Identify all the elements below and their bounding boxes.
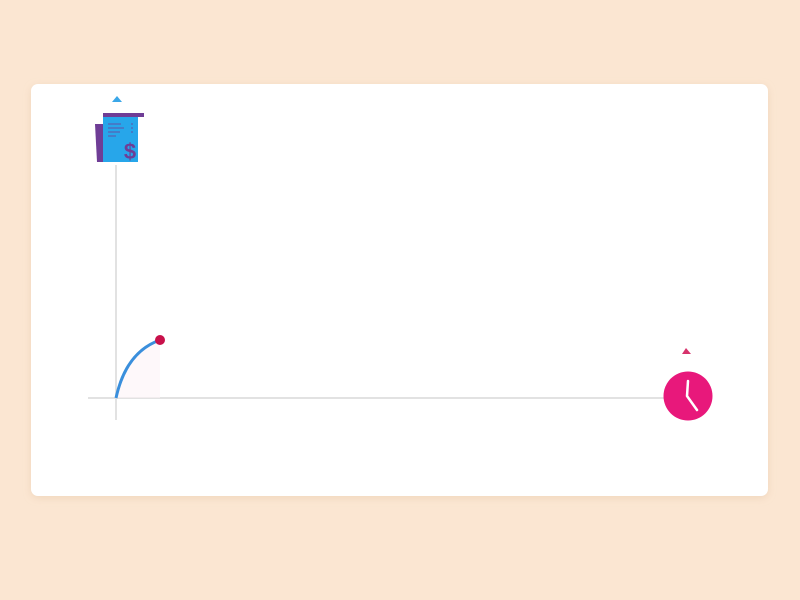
chart: area fill: [116, 340, 160, 398]
icon: clock: [664, 372, 712, 420]
icon: y-axis arrow: [112, 96, 122, 102]
x axis: [88, 397, 666, 399]
chart: end point: [155, 335, 165, 345]
panel: chart card: [31, 84, 768, 496]
icon: receipt: [95, 113, 144, 164]
icon: receipt: $: [124, 139, 136, 164]
chart: growth curve: [116, 340, 160, 398]
y axis: [115, 165, 117, 420]
icon: x-axis arrow: [682, 348, 691, 354]
